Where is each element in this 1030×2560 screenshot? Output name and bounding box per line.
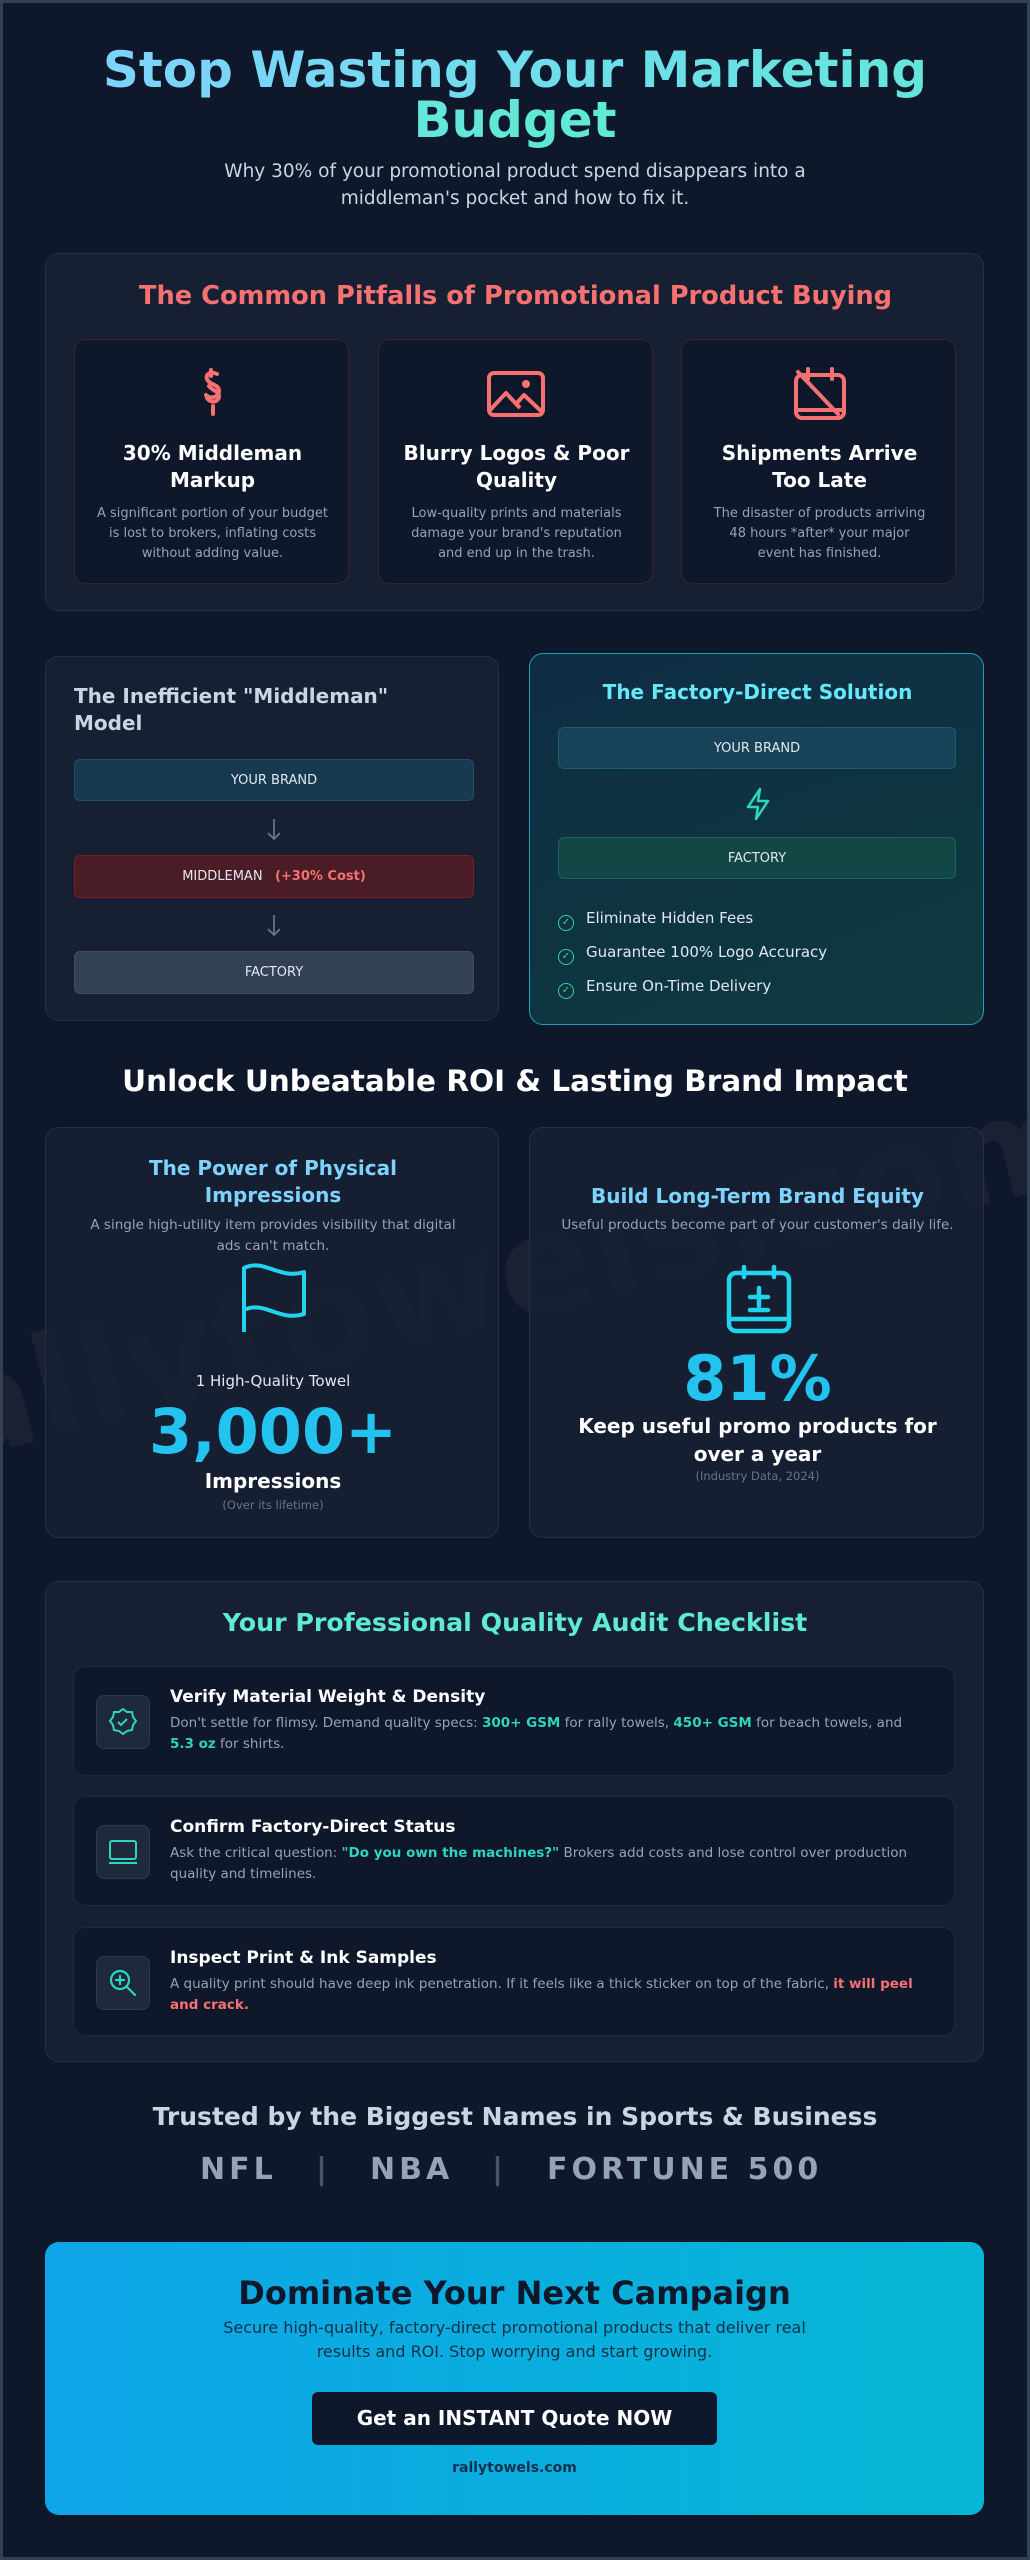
subtitle: Why 30% of your promotional product spend disappears into a middleman's pocket and how to fix it. — [224, 161, 806, 209]
checklist item: material: Verify Material Weight & Density — [170, 1687, 485, 1707]
card: late: Shipments Arrive — [722, 441, 917, 465]
benefits list: ✓ — [562, 917, 570, 928]
box: your brand: YOUR BRAND — [231, 772, 317, 788]
arrow — [268, 819, 280, 840]
logos row: NFL — [200, 2152, 277, 2187]
box: middleman — [74, 855, 474, 898]
checklist item: factory status: Confirm Factory-Direct Status — [170, 1817, 456, 1837]
audit heading: Your Professional Quality Audit Checklist — [223, 1608, 807, 1637]
stat: 3,000+: 3,000+ — [149, 1395, 397, 1468]
panel: brand equity: Keep useful promo products for over a year — [578, 1414, 937, 1466]
benefits list: Ensure On-Time Delivery — [586, 977, 771, 995]
panel: physical impressions: (Over its lifetime) — [222, 1498, 324, 1512]
factory heading: The Factory-Direct Solution — [603, 680, 912, 704]
box: middleman: (+30% Cost) — [275, 869, 366, 884]
panel: physical impressions: Impressions — [205, 1183, 341, 1207]
benefits list: Eliminate Hidden Fees — [586, 909, 753, 927]
benefits list — [558, 909, 827, 999]
card: late — [681, 339, 956, 584]
pitfalls heading: The Common Pitfalls of Promotional Product Buying — [139, 281, 892, 311]
card: quality: Low-quality prints and materials damage your brand's reputation and end up in the trash. — [411, 506, 622, 561]
panel: brand equity: (Industry Data, 2024) — [696, 1469, 819, 1483]
panel: middleman model — [45, 656, 499, 1021]
card: markup: A significant portion of your budget is lost to brokers, inflating costs without adding value. — [97, 506, 328, 561]
button — [312, 2392, 717, 2445]
box: factory: FACTORY — [245, 965, 303, 980]
icon: image — [487, 371, 545, 417]
box: your brand — [74, 759, 474, 801]
card: markup — [74, 339, 349, 584]
box: your brand: YOUR BRAND — [714, 740, 800, 756]
panel: physical impressions: The Power of Physical — [149, 1156, 397, 1180]
checklist item: print: Inspect Print & Ink Samples — [170, 1948, 437, 1968]
icon: bolt — [746, 788, 770, 820]
title — [103, 41, 927, 149]
trusted heading: Trusted by the Biggest Names in Sports & Business — [153, 2102, 877, 2131]
box: factory — [558, 837, 956, 879]
box: factory — [74, 951, 474, 994]
checklist item: material: Don't settle for flimsy. Demand quality specs: 300+ GSM for rally towels, 450+ GSM for beach towels, and 5.3 oz for shirts. — [170, 1715, 902, 1752]
ROI heading: Unlock Unbeatable ROI & Lasting Brand Impact — [122, 1064, 908, 1098]
box: middleman: MIDDLEMAN — [182, 869, 263, 884]
card: markup: Markup — [170, 468, 255, 492]
CTA panel: rallytowels.com — [452, 2460, 577, 2476]
card: quality: Blurry Logos & Poor — [404, 441, 629, 465]
panel: audit checklist — [45, 1581, 984, 2062]
benefits list: ✓ — [562, 985, 570, 996]
checklist item: print: A quality print should have deep ink penetration. If it feels like a thick sticker on top of the fabric, it will peel and crack. — [170, 1976, 913, 2013]
checklist item: factory status: Ask the critical question: "Do you own the machines?" Brokers add costs and lose control over production quality and timelines. — [170, 1845, 907, 1882]
icon: calendar — [726, 1264, 792, 1334]
card: quality: Quality — [476, 468, 557, 492]
benefits list: Guarantee 100% Logo Accuracy — [586, 943, 827, 961]
logos row: | — [492, 2152, 507, 2187]
panel: physical impressions: 1 High-Quality Towel — [196, 1372, 350, 1390]
icon: badge check — [96, 1695, 150, 1749]
panel: pitfalls — [45, 253, 984, 611]
checklist item: factory status — [73, 1796, 955, 1906]
logos row — [200, 2152, 822, 2187]
CTA panel: Secure high-quality, factory-direct promotional products that deliver real results and ROI. Stop worrying and start growing. — [223, 2318, 806, 2361]
logos row: | — [316, 2152, 331, 2187]
box: factory: FACTORY — [728, 850, 786, 866]
logos row: NBA — [370, 2152, 453, 2187]
checklist item: print — [73, 1927, 955, 2036]
box: your brand — [558, 727, 956, 769]
button: Get an INSTANT Quote NOW — [357, 2406, 672, 2430]
panel: physical impressions — [45, 1127, 499, 1538]
panel: brand equity — [529, 1127, 984, 1538]
panel: physical impressions: Impressions — [205, 1469, 341, 1493]
icon: zoom — [96, 1956, 150, 2010]
icon: calendar off — [794, 367, 846, 420]
checklist item: material — [73, 1666, 955, 1776]
CTA panel — [45, 2242, 984, 2515]
benefits list: ✓ — [562, 951, 570, 962]
panel: brand equity: Build Long-Term Brand Equity — [591, 1184, 924, 1208]
icon: laptop — [96, 1825, 150, 1879]
panel: physical impressions: A single high-utility item provides visibility that digital ads can't match. — [90, 1217, 456, 1254]
icon: flag — [242, 1263, 306, 1332]
card: late: The disaster of products arriving 48 hours *after* your major event has finished. — [714, 506, 925, 561]
card: quality — [378, 339, 653, 584]
card: late: Too Late — [772, 468, 867, 492]
middleman heading: The Inefficient "Middleman" Model — [74, 684, 388, 735]
card: markup: 30% Middleman — [123, 441, 302, 465]
CTA heading: Dominate Your Next Campaign — [238, 2274, 791, 2312]
title: Stop Wasting Your Marketing — [103, 41, 927, 99]
icon: dollar — [204, 368, 221, 416]
logos row: FORTUNE 500 — [547, 2152, 822, 2187]
stat: 81%: 81% — [683, 1342, 832, 1415]
arrow — [268, 915, 280, 936]
title: Budget — [413, 91, 617, 149]
panel: factory-direct — [529, 653, 984, 1025]
panel: brand equity: Useful products become part of your customer's daily life. — [561, 1217, 954, 1233]
